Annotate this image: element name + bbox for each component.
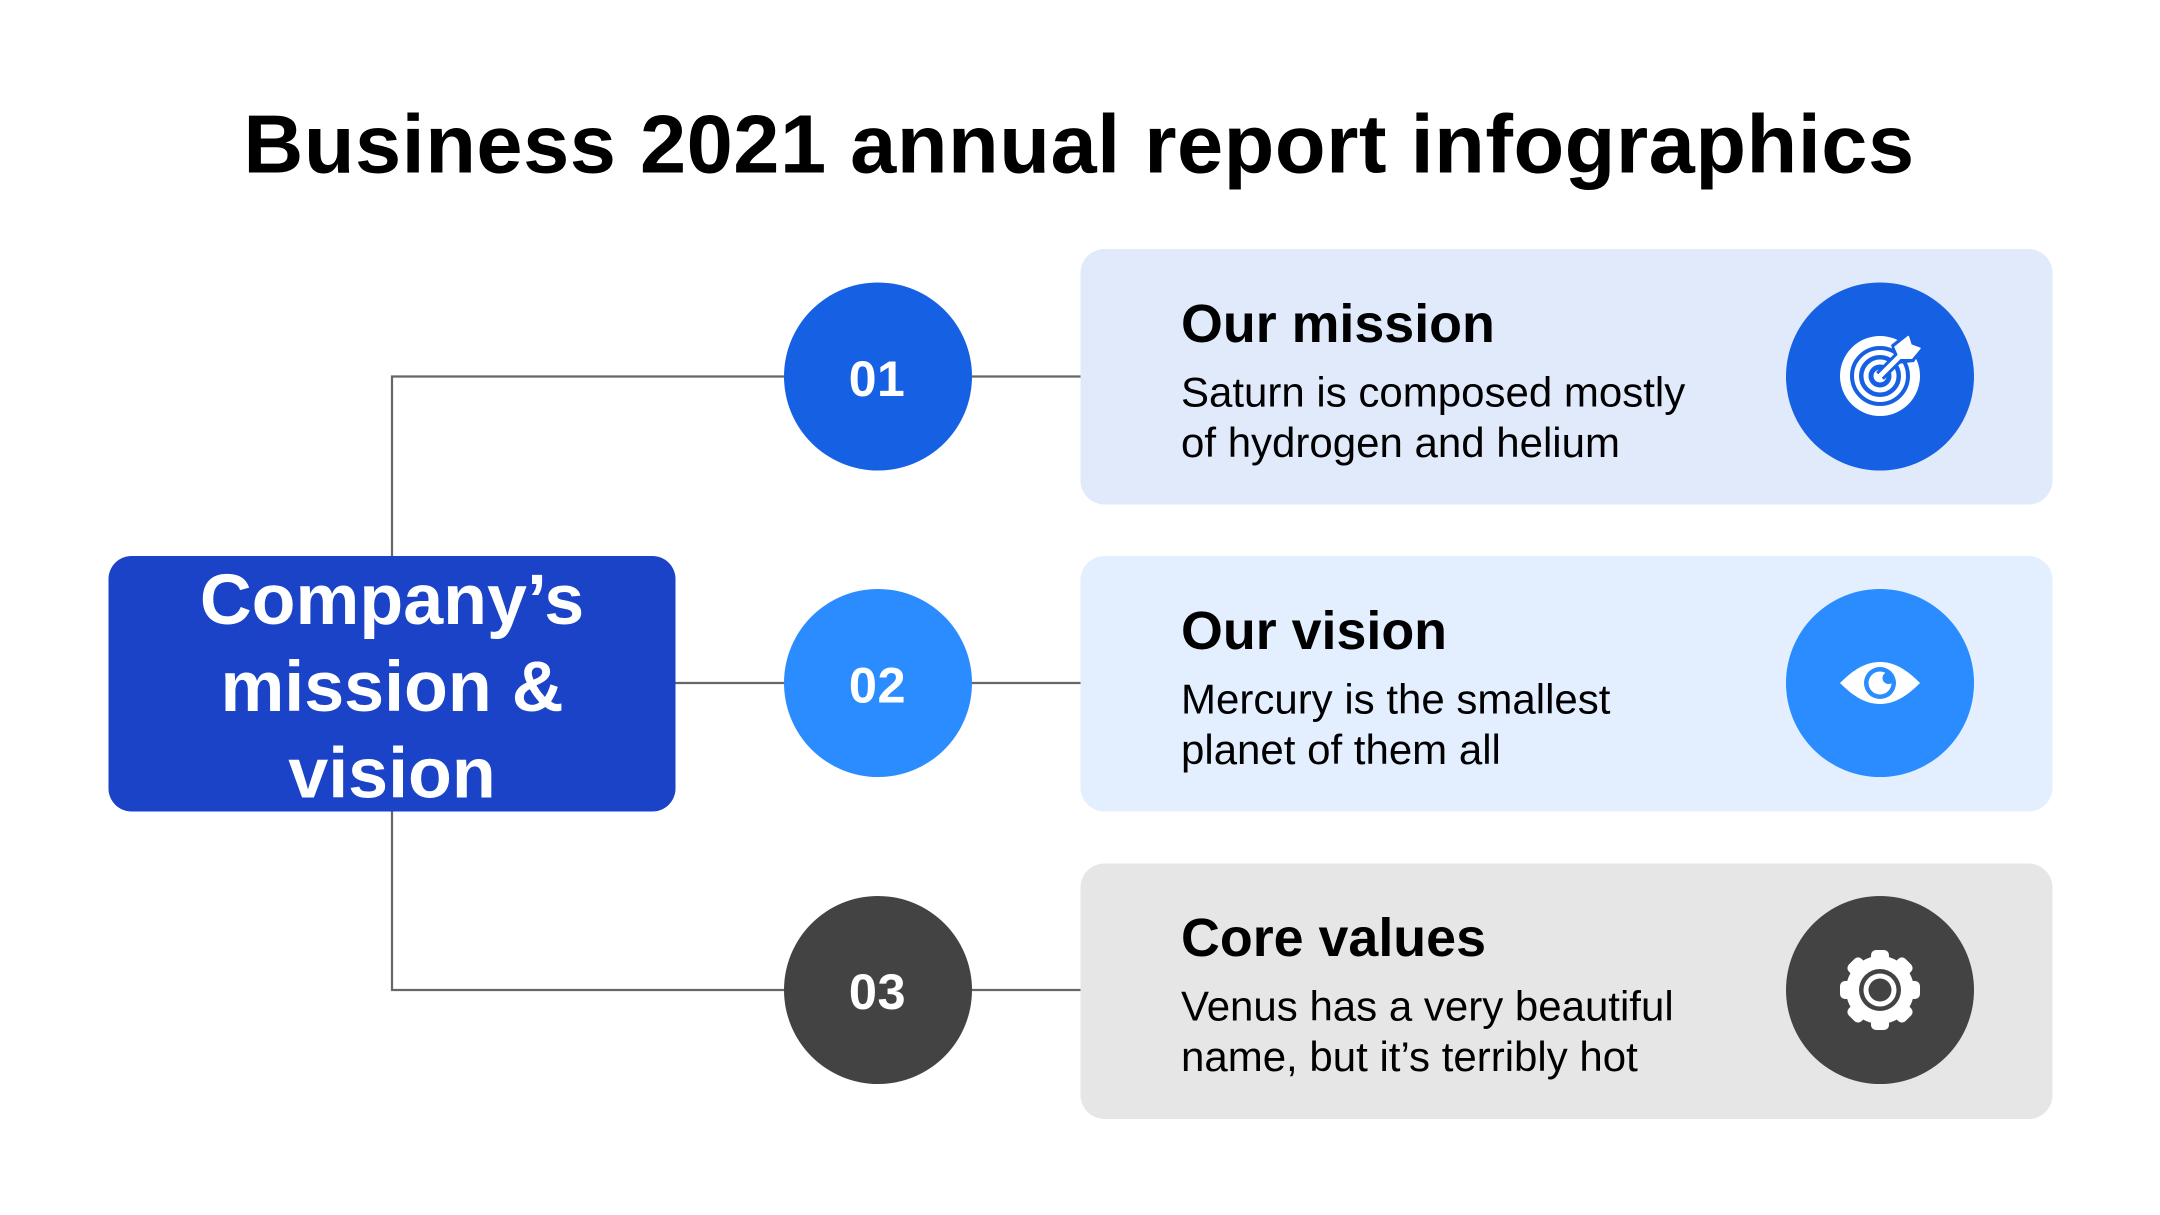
- icon: gear: [1786, 896, 1974, 1084]
- number badge 03: 03: [849, 963, 906, 1020]
- title: Business 2021 annual report infographics: [243, 98, 1915, 190]
- heading: our mission: Our mission: [1181, 294, 1495, 354]
- panel: our vision: [1080, 556, 2052, 812]
- text: our vision description: Mercury is the smallest: [1181, 676, 1611, 722]
- central box: company's mission and vision: [108, 556, 676, 814]
- text: our vision description: planet of them all: [1181, 726, 1501, 773]
- panel: core values: [1080, 864, 2052, 1119]
- central box: company's mission and vision: mission &: [220, 647, 564, 727]
- number badge 02: 02: [849, 656, 906, 714]
- number badge 03: [784, 896, 972, 1084]
- heading: our vision: Our vision: [1181, 601, 1447, 661]
- number badge 01: 01: [849, 351, 905, 407]
- text: core values description: Venus has a very beautiful: [1181, 982, 1674, 1030]
- text: our mission description: Saturn is composed mostly: [1181, 368, 1685, 416]
- central box: company's mission and vision: vision: [288, 734, 496, 814]
- connector lines: [392, 376, 1081, 990]
- number badge 02: [784, 589, 972, 777]
- number badge 01: [784, 282, 972, 470]
- icon: target with arrow: [1786, 282, 1974, 470]
- icon: eye: [1786, 589, 1974, 777]
- heading: core values: Core values: [1181, 908, 1486, 968]
- text: our mission description: of hydrogen and helium: [1181, 419, 1620, 466]
- text: core values description: name, but it’s terribly hot: [1181, 1033, 1638, 1080]
- panel: our mission: [1080, 249, 2052, 504]
- central box: company's mission and vision: Company’s: [200, 560, 584, 640]
